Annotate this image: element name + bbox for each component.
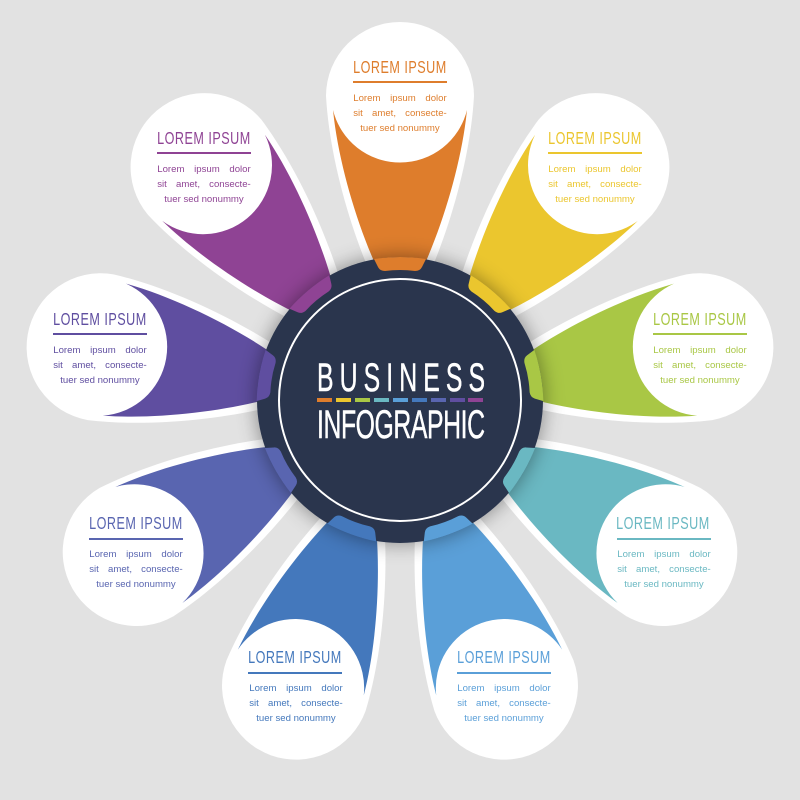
panel: petal 8 purple: Lorem ipsum dolor: [53, 345, 148, 356]
panel: petal 4 teal: [477, 402, 764, 653]
panel: petal 4 teal: tuer sed nonummy: [624, 579, 704, 590]
panel: petal 9 magenta: LOREM IPSUM: [157, 129, 251, 149]
panel: petal 7 indigo: tuer sed nonummy: [96, 579, 176, 590]
panel: petal 3 green: [517, 261, 785, 450]
panel: petal 3 green: LOREM IPSUM: [653, 310, 747, 330]
panel: petal 8 purple: tuer sed nonummy: [60, 375, 140, 386]
panel: petal 9 magenta: tuer sed nonummy: [164, 194, 244, 205]
panel: petal 2 yellow: [428, 63, 700, 346]
panel: petal 2 yellow: sit amet, consecte-: [548, 179, 642, 190]
title: business: BUSINESS: [317, 356, 485, 401]
panel: petal 6 blue: [201, 499, 424, 781]
panel: petal 7 indigo: [36, 402, 323, 653]
panel: petal 1 orange: LOREM IPSUM: [353, 58, 447, 78]
panel: petal 5 light blue: LOREM IPSUM: [457, 648, 551, 668]
disc tabs in petal colours: [255, 257, 545, 543]
panel: petal 6 blue: Lorem ipsum dolor: [249, 683, 344, 694]
panel: petal 8 purple: LOREM IPSUM: [53, 310, 147, 330]
panel: petal 5 light blue: sit amet, consecte-: [457, 698, 551, 709]
panel: petal 7 indigo: LOREM IPSUM: [89, 514, 183, 534]
central dark disc: [257, 257, 543, 543]
panel: petal 4 teal: LOREM IPSUM: [616, 514, 710, 534]
colour dash row: [317, 398, 483, 402]
panel: petal 8 purple: sit amet, consecte-: [53, 360, 147, 371]
panel: petal 2 yellow: tuer sed nonummy: [555, 194, 635, 205]
panel: petal 7 indigo: Lorem ipsum dolor: [89, 549, 184, 560]
panel: petal 5 light blue: tuer sed nonummy: [464, 713, 544, 724]
panel: petal 2 yellow: Lorem ipsum dolor: [548, 164, 643, 175]
panel: petal 9 magenta: [100, 63, 372, 346]
inner white ring: [279, 279, 521, 521]
panel: petal 6 blue: LOREM IPSUM: [248, 648, 342, 668]
panel: petal 3 green: tuer sed nonummy: [660, 375, 740, 386]
panel: petal 2 yellow: LOREM IPSUM: [548, 129, 642, 149]
panel: petal 8 purple: [15, 261, 283, 450]
panel: petal 3 green: Lorem ipsum dolor: [653, 345, 748, 356]
panel: petal 5 light blue: [376, 499, 599, 781]
title: infographic: INFOGRAPHIC: [317, 403, 485, 448]
panel: petal 5 light blue: Lorem ipsum dolor: [457, 683, 552, 694]
panel: petal 4 teal: sit amet, consecte-: [617, 564, 711, 575]
panel: petal 7 indigo: sit amet, consecte-: [89, 564, 183, 575]
panel: petal 6 blue: sit amet, consecte-: [249, 698, 343, 709]
panel: petal 1 orange: tuer sed nonummy: [360, 123, 440, 134]
panel: petal 1 orange: Lorem ipsum dolor: [353, 93, 448, 104]
panel: petal 4 teal: Lorem ipsum dolor: [617, 549, 712, 560]
panel: petal 6 blue: tuer sed nonummy: [256, 713, 336, 724]
panel: petal 9 magenta: Lorem ipsum dolor: [157, 164, 252, 175]
panel: petal 9 magenta: sit amet, consecte-: [157, 179, 251, 190]
panel: petal 1 orange: sit amet, consecte-: [353, 108, 447, 119]
panel: petal 1 orange: [326, 22, 474, 268]
panel: petal 3 green: sit amet, consecte-: [653, 360, 747, 371]
